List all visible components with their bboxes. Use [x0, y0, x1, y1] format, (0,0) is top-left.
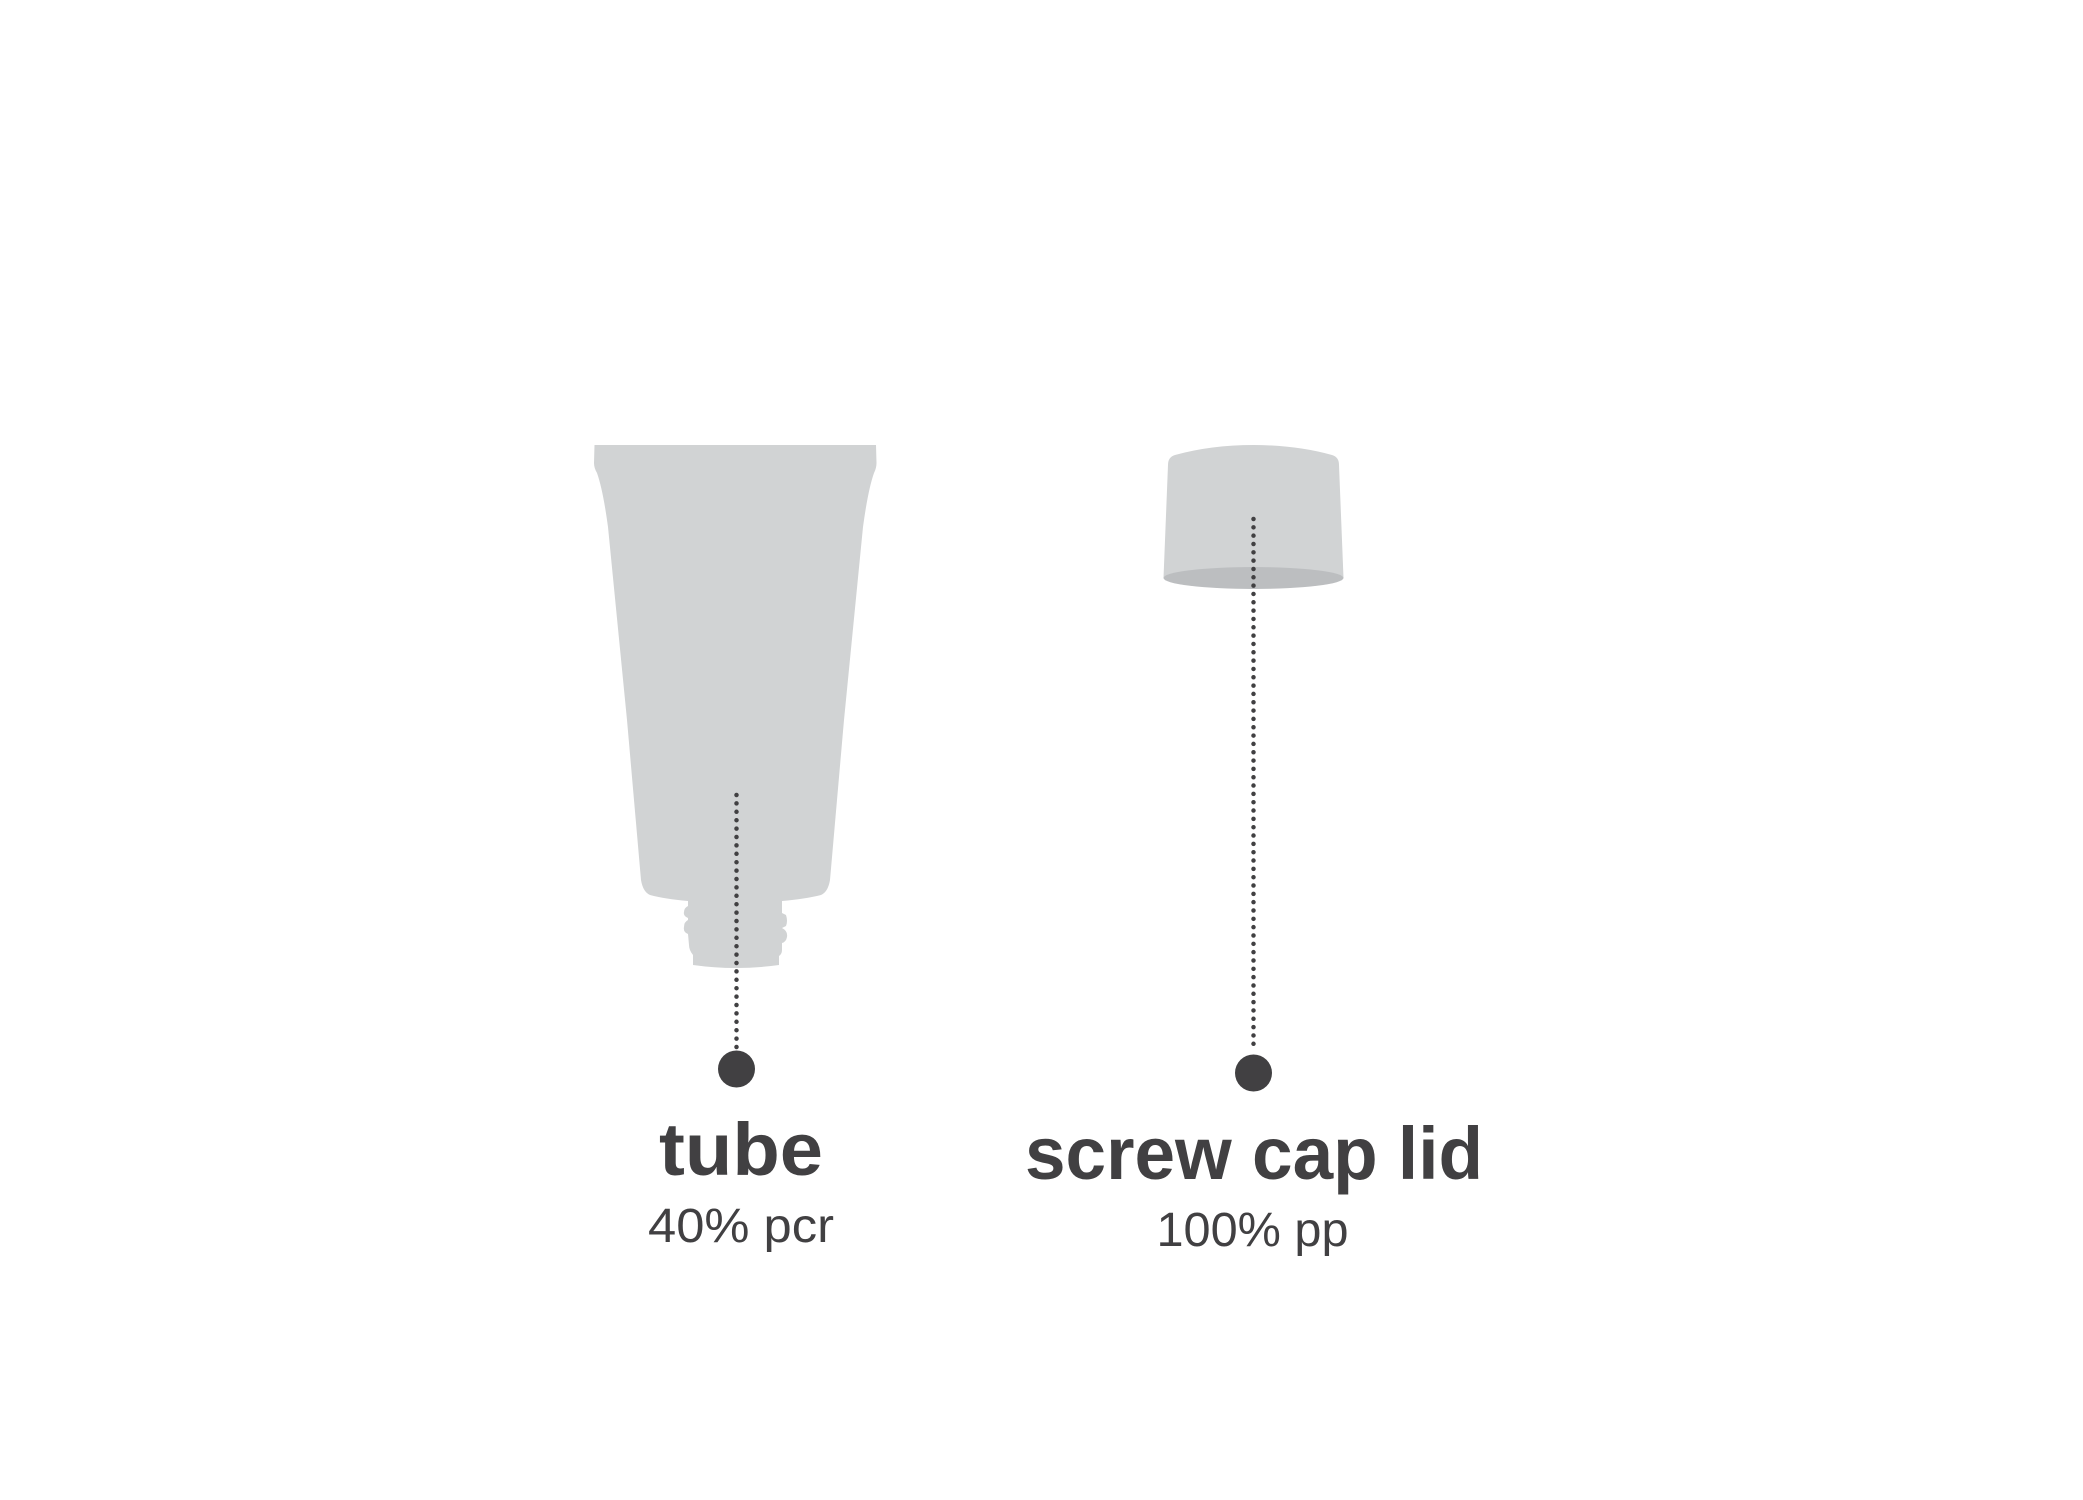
panel: screw cap lid component — [1025, 445, 1483, 1257]
dotted leader line: cap — [1251, 519, 1256, 1050]
dotted leader line: tube — [734, 795, 739, 1047]
text: cap material: 100% pp — [1156, 1204, 1348, 1257]
cap underside ellipse — [1164, 567, 1344, 589]
icon: cap silhouette — [1164, 445, 1344, 589]
marker dot: tube — [718, 1050, 755, 1088]
marker dot: cap — [1235, 1054, 1272, 1092]
heading: screw cap lid: screw cap lid — [1025, 1112, 1483, 1195]
heading: tube: tube — [659, 1108, 823, 1191]
text: tube material: 40% pcr — [648, 1200, 834, 1253]
icon: tube silhouette — [594, 445, 876, 968]
panel: tube component — [594, 445, 876, 1253]
